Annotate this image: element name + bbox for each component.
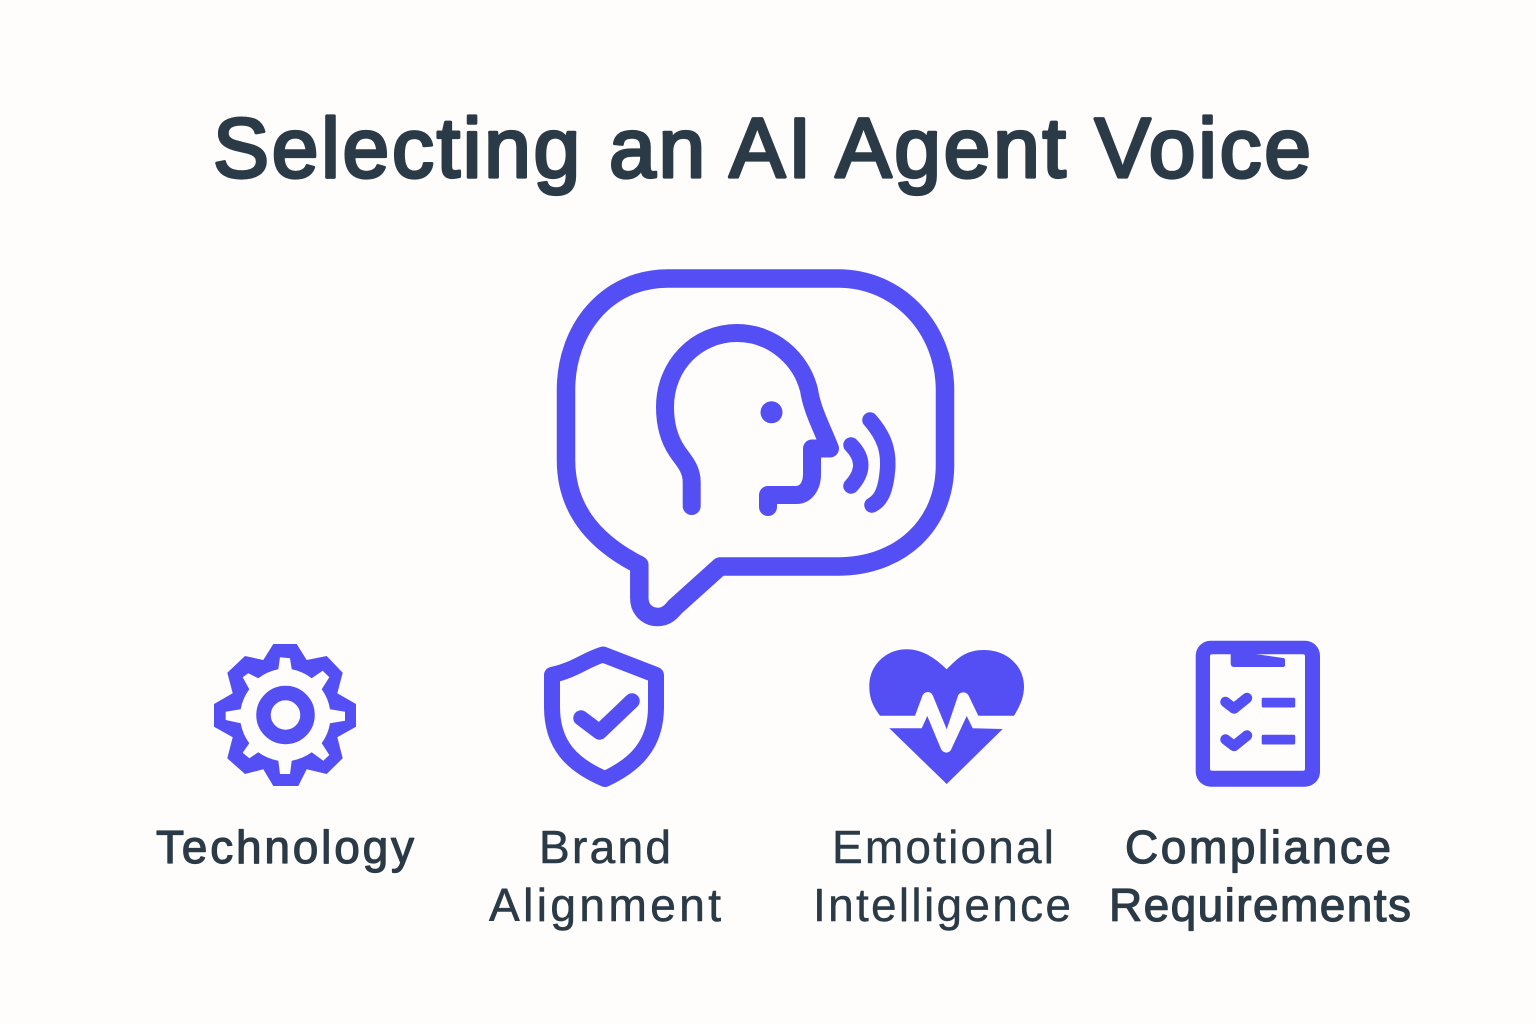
heart lower half: [889, 716, 1003, 784]
second line: [1262, 735, 1295, 744]
icon: heart with pulse: [869, 649, 1024, 784]
sound wave large: [870, 420, 888, 505]
icon: shield with check: [552, 654, 656, 779]
second check: [1226, 736, 1247, 746]
clipboard frame: [1196, 641, 1320, 787]
icon: speech bubble with speaking head: [566, 278, 945, 617]
gear hub: [264, 693, 308, 737]
label: Brand Alignment: [489, 821, 721, 931]
label: Compliance Requirements: [1109, 821, 1411, 931]
first line: [1262, 698, 1295, 708]
eye: [760, 401, 782, 423]
label: Emotional Intelligence: Intelligence: [813, 879, 1071, 931]
sound wave small: [851, 445, 861, 486]
label: Brand Alignment: Brand: [539, 821, 671, 873]
label: Emotional Intelligence: [813, 821, 1071, 931]
check mark: [581, 701, 632, 732]
label: Brand Alignment: Alignment: [489, 879, 721, 931]
clipboard clip: [1231, 654, 1285, 667]
label: Technology: Technology: [156, 821, 414, 873]
label: Compliance Requirements: Requirements: [1109, 879, 1411, 931]
shield outline: [552, 654, 656, 779]
gear body with spokes cut out: [214, 644, 356, 786]
title: Selecting an AI Agent Voice: [213, 101, 1311, 195]
icon: gear: [214, 644, 356, 786]
icon: clipboard checklist: [1196, 641, 1320, 787]
head profile: [665, 333, 830, 507]
first check: [1226, 698, 1247, 708]
label: Compliance Requirements: Compliance: [1125, 821, 1391, 873]
label: Emotional Intelligence: Emotional: [832, 821, 1054, 873]
heart upper half: [869, 649, 1024, 729]
speech bubble outline: [566, 278, 945, 617]
